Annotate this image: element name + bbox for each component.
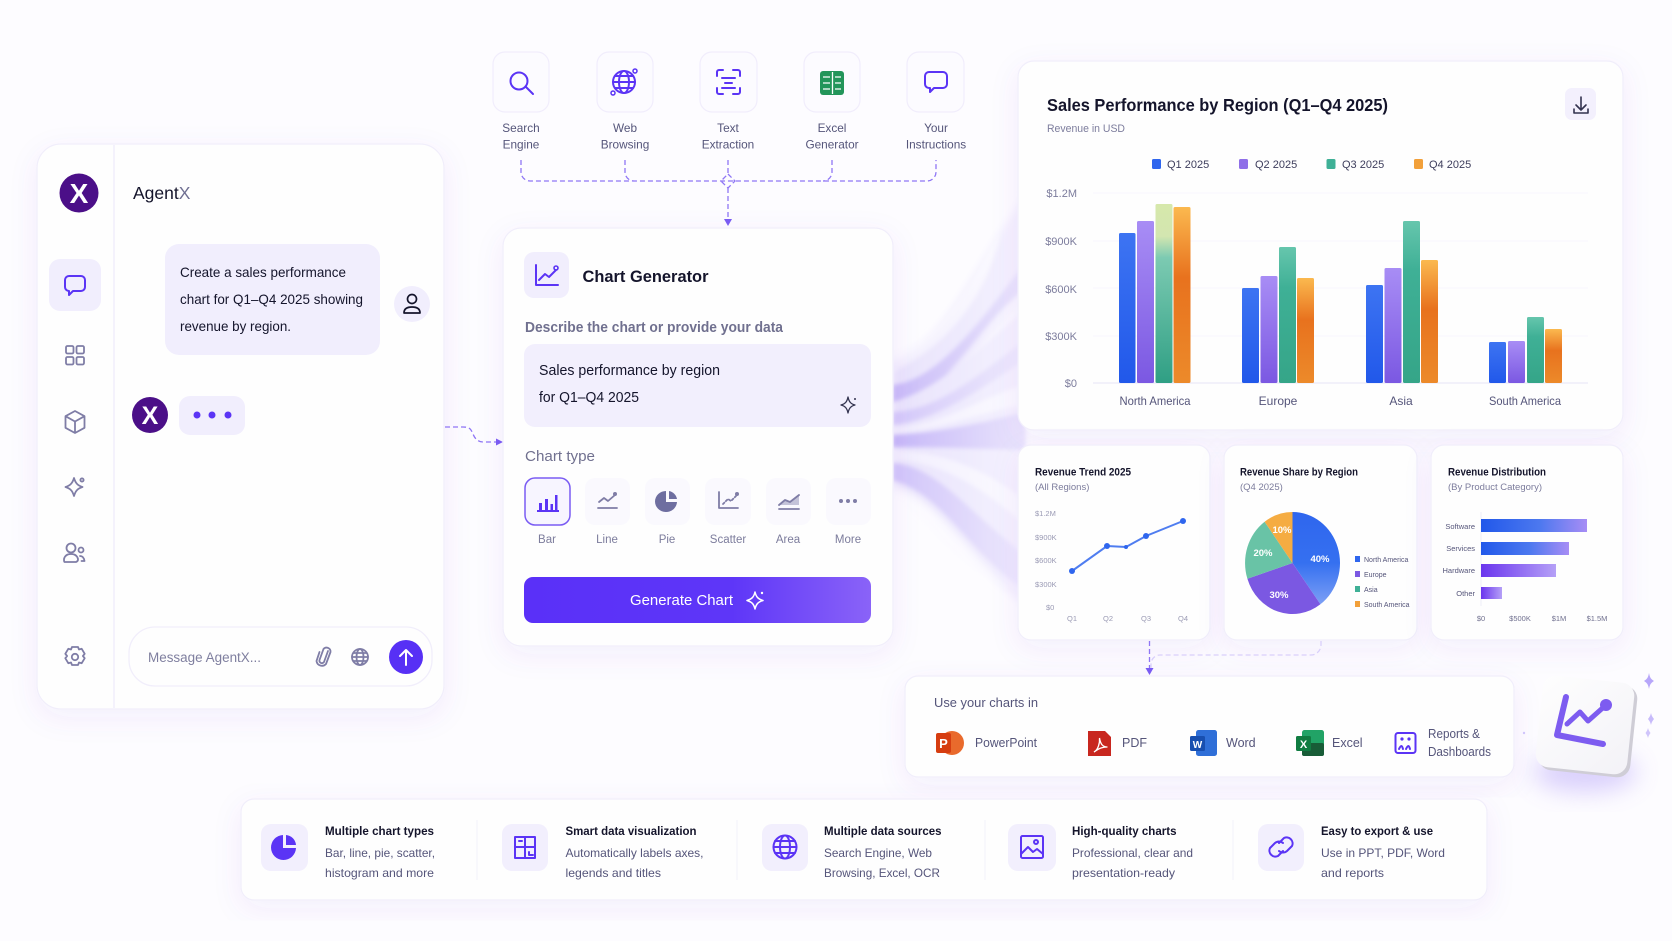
user message — [165, 244, 380, 355]
pie legend — [1355, 556, 1410, 609]
feature: chart types — [261, 824, 435, 880]
tool: text extraction — [700, 52, 757, 152]
feature: chart types: Multiple chart types — [325, 824, 434, 838]
legend: Q3 2025 — [1342, 159, 1384, 171]
y axis: $0 — [1065, 378, 1077, 390]
tool: excel generator: Excel — [818, 121, 846, 135]
feature: smart visualization: legends and titles — [566, 866, 661, 880]
panel: use your charts in — [905, 676, 1514, 777]
tool: your instructions: Instructions — [906, 138, 966, 152]
chart type label: Chart type — [525, 448, 595, 465]
panel: revenue distribution — [1431, 445, 1623, 640]
logo — [60, 174, 98, 212]
generate button — [524, 577, 871, 623]
icon: chart — [524, 252, 569, 298]
y axis: $900K — [1045, 236, 1078, 248]
pie legend: South America — [1364, 602, 1410, 609]
tool: search engine: Search — [502, 121, 540, 135]
tool: your instructions — [906, 52, 966, 152]
panel: revenue share: 30% — [1269, 590, 1289, 601]
y axis: $600K — [1045, 284, 1078, 296]
tool: text extraction: Text — [717, 121, 740, 135]
Reports: Dashboards — [1428, 745, 1491, 759]
message input — [129, 627, 432, 686]
tool: search engine — [493, 52, 549, 152]
type: more — [826, 478, 871, 546]
user avatar — [394, 286, 430, 322]
pie legend: North America — [1364, 557, 1408, 564]
feature: data sources: Search Engine, Web — [824, 846, 932, 860]
nav: settings — [65, 647, 85, 665]
tool: web browsing: Web — [613, 121, 637, 135]
panel: revenue distribution: Other — [1456, 589, 1475, 598]
app name: AgentX — [133, 183, 191, 203]
legend — [1152, 159, 1471, 171]
panel: sales performance chart — [1018, 61, 1623, 430]
connector: charts to export — [1146, 641, 1321, 675]
typing indicator: X — [142, 402, 159, 430]
panel: revenue distribution: (By Product Category) — [1448, 482, 1542, 493]
line chart — [1069, 518, 1186, 574]
generate button: Generate Chart — [630, 593, 733, 609]
PDF — [1088, 731, 1147, 756]
feature: smart visualization: Automatically labels axes, — [566, 846, 704, 860]
type: area — [766, 478, 811, 546]
panel: revenue distribution: Software — [1445, 522, 1475, 531]
feature: export: Use in PPT, PDF, Word — [1321, 846, 1445, 860]
typing indicator — [132, 396, 245, 435]
feature: high quality: High-quality charts — [1072, 824, 1177, 838]
legend: Q1 2025 — [1167, 159, 1209, 171]
nav: chat active — [49, 259, 101, 311]
Excel — [1296, 730, 1363, 756]
feature: high quality: Professional, clear and — [1072, 846, 1193, 860]
Word: W — [1193, 740, 1203, 751]
prompt box — [524, 344, 871, 427]
panel: revenue trend: Revenue Trend 2025 — [1035, 466, 1131, 478]
tool: web browsing: Browsing — [601, 138, 649, 152]
pie legend: Asia — [1364, 587, 1378, 594]
x axis labels: Asia — [1389, 394, 1413, 408]
Reports — [1396, 727, 1491, 759]
PowerPoint — [936, 731, 1037, 755]
type: more: More — [835, 534, 861, 546]
type: scatter — [705, 478, 751, 546]
feature: data sources — [762, 824, 942, 880]
pie legend: Europe — [1364, 572, 1387, 579]
feature: smart visualization — [502, 824, 704, 880]
y axis: $300K — [1045, 331, 1078, 343]
legend: Q2 2025 — [1255, 159, 1297, 171]
tool: web browsing — [597, 52, 653, 152]
arrow: chat to generator — [445, 427, 503, 446]
type: line: Line — [596, 534, 618, 546]
bars: Europe — [1242, 247, 1314, 383]
pie chart — [1245, 512, 1340, 614]
panel: revenue share: Revenue Share by Region — [1240, 466, 1358, 478]
icon: 3D chart tile — [1523, 673, 1654, 792]
Word — [1190, 730, 1256, 756]
type: area: Area — [776, 534, 801, 546]
prompt box: for Q1–Q4 2025 — [539, 390, 639, 406]
PowerPoint: PowerPoint — [975, 736, 1037, 750]
message input: Message AgentX... — [148, 650, 261, 665]
nav: grid — [66, 346, 84, 364]
user message: Create a sales performance — [180, 264, 346, 280]
axis labels: $600K — [1035, 556, 1057, 565]
feature: smart visualization: Smart data visualization — [566, 824, 696, 838]
type: line — [585, 478, 630, 546]
subtitle: Revenue in USD — [1047, 123, 1125, 135]
panel: revenue distribution: $500K — [1509, 614, 1531, 623]
panel: revenue distribution: Hardware — [1442, 566, 1475, 575]
heading: Chart Generator — [582, 267, 709, 286]
feature: data sources: Multiple data sources — [824, 824, 942, 838]
type: bar — [525, 478, 570, 546]
Word: Word — [1226, 736, 1256, 750]
nav: sparkle — [66, 478, 84, 496]
panel: revenue distribution: $0 — [1477, 614, 1485, 623]
nav: users — [64, 544, 84, 562]
nav: box — [66, 411, 84, 433]
panel: revenue distribution: $1.5M — [1587, 614, 1607, 623]
x axis labels: South America — [1489, 394, 1561, 408]
axis labels: Q1 — [1067, 614, 1077, 623]
feature: high quality — [1008, 824, 1193, 880]
panel: revenue share — [1224, 445, 1417, 640]
panel: revenue share: 40% — [1310, 554, 1330, 565]
bars: North America — [1119, 204, 1190, 383]
logo: X — [70, 178, 89, 209]
panel: revenue trend — [1018, 445, 1210, 640]
axis labels: Q4 — [1178, 614, 1188, 623]
feature: chart types: histogram and more — [325, 866, 434, 880]
download button — [1565, 88, 1596, 120]
feature: export: Easy to export & use — [1321, 824, 1433, 838]
chart title: Sales Performance by Region (Q1–Q4 2025) — [1047, 95, 1388, 115]
tool: your instructions: Your — [924, 121, 948, 135]
type: pie — [645, 478, 690, 546]
axis labels — [1035, 509, 1188, 623]
panel: AgentX chat — [37, 144, 444, 709]
type: pie: Pie — [659, 534, 675, 546]
panel: use your charts in: Use your charts in — [934, 696, 1038, 710]
panel: features — [241, 799, 1487, 900]
PDF: PDF — [1122, 736, 1147, 750]
tool: text extraction: Extraction — [702, 138, 754, 152]
connector: tools to generator — [521, 160, 936, 226]
panel: revenue share: 20% — [1253, 548, 1273, 559]
panel: revenue distribution: Revenue Distribution — [1448, 466, 1546, 478]
tool: excel generator: Generator — [805, 138, 859, 152]
axis labels: $1.2M — [1035, 509, 1056, 518]
Excel: Excel — [1332, 736, 1363, 750]
prompt box: Sales performance by region — [539, 363, 720, 379]
feature: high quality: presentation-ready — [1072, 866, 1175, 880]
type: scatter: Scatter — [710, 534, 746, 546]
feature: data sources: Browsing, Excel, OCR — [824, 866, 940, 880]
tool: excel generator — [804, 52, 860, 152]
bars: Asia — [1366, 221, 1438, 383]
tool: search engine: Engine — [503, 138, 540, 152]
horizontal bars — [1481, 519, 1587, 599]
data flow wave — [893, 195, 1025, 606]
Reports: Reports & — [1428, 727, 1481, 741]
type: bar: Bar — [538, 534, 556, 546]
x axis labels: Europe — [1259, 394, 1298, 408]
axis labels: Q2 — [1103, 614, 1113, 623]
panel: revenue distribution: $1M — [1552, 614, 1566, 623]
PowerPoint: P — [939, 736, 948, 751]
y axis — [1045, 188, 1078, 390]
panel: revenue share: (Q4 2025) — [1240, 482, 1283, 493]
Excel: X — [1300, 739, 1308, 751]
panel: revenue trend: (All Regions) — [1035, 482, 1089, 493]
legend: Q4 2025 — [1429, 159, 1471, 171]
axis labels: $0 — [1046, 603, 1054, 612]
panel: revenue distribution: Services — [1446, 544, 1475, 553]
feature: export: and reports — [1321, 866, 1384, 880]
axis labels: $300K — [1035, 580, 1057, 589]
y axis: $1.2M — [1046, 188, 1077, 200]
panel: chart generator — [503, 228, 893, 646]
axis labels: Q3 — [1141, 614, 1151, 623]
user message: revenue by region. — [180, 318, 291, 334]
bars: South America — [1489, 317, 1562, 383]
feature: export — [1258, 824, 1445, 880]
x axis labels: North America — [1120, 394, 1191, 408]
user message: chart for Q1–Q4 2025 showing — [180, 291, 363, 307]
x axis labels — [1120, 394, 1561, 408]
panel: revenue share: 10% — [1272, 525, 1292, 536]
describe label: Describe the chart or provide your data — [525, 320, 784, 336]
feature: chart types: Bar, line, pie, scatter, — [325, 846, 435, 860]
axis labels: $900K — [1035, 533, 1057, 542]
